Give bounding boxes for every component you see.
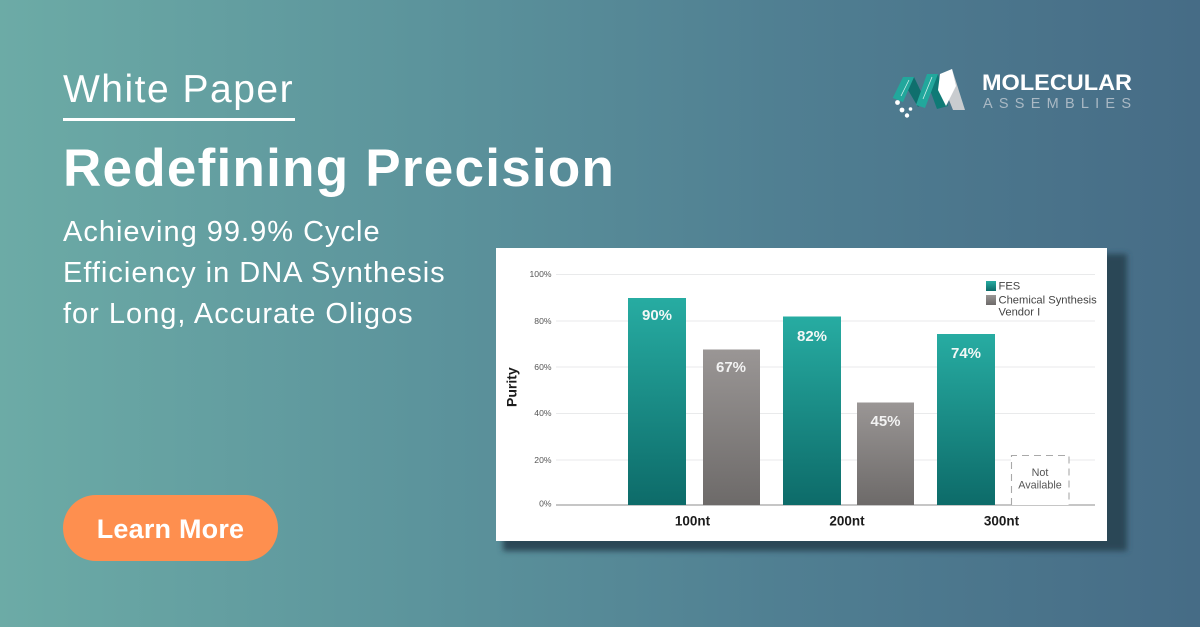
bar: 100nt FES 90% — [628, 298, 686, 505]
subtitle: for Long, Accurate Oligos — [63, 298, 414, 330]
bar: 200nt chemical 45%: 45% — [870, 413, 901, 430]
wordmark: ASSEMBLIES — [983, 96, 1131, 112]
button: Learn More: Learn More — [97, 514, 244, 544]
grid lines and y axis labels — [530, 269, 1095, 508]
grid lines and y axis labels: 40% — [534, 408, 552, 418]
bar: 300nt FES 74% — [937, 334, 995, 505]
x axis labels: 100nt — [675, 514, 711, 528]
icon: logo mark — [893, 69, 965, 118]
grid lines and y axis labels: 100% — [530, 269, 552, 279]
grid lines and y axis labels: 80% — [534, 316, 552, 326]
card shadow — [503, 254, 1127, 551]
legend: Vendor I — [998, 306, 1040, 318]
title: Redefining Precision — [63, 139, 615, 198]
grid lines and y axis labels: 60% — [534, 362, 552, 372]
subtitle: Achieving 99.9% Cycle — [63, 216, 381, 248]
eyebrow: White Paper: White Paper — [63, 68, 294, 111]
not available box: Available — [1018, 480, 1062, 492]
bar: 100nt chemical 67% — [703, 350, 760, 505]
button: Learn More — [63, 495, 278, 561]
legend: Chemical Synthesis — [998, 294, 1097, 306]
bar: 300nt FES 74%: 74% — [951, 345, 981, 362]
logo: Molecular Assemblies — [892, 69, 1132, 118]
legend: FES — [998, 280, 1020, 292]
bar: 200nt FES 82% — [783, 316, 841, 505]
x axis labels: 200nt — [829, 514, 865, 528]
not available box: Not — [1032, 467, 1048, 479]
x axis labels: 300nt — [984, 514, 1020, 528]
wordmark: MOLECULAR — [982, 70, 1132, 95]
panel: chart card — [496, 248, 1130, 554]
bar: 200nt FES 82%: 82% — [797, 328, 827, 345]
x axis labels — [675, 514, 1020, 528]
grid lines and y axis labels: 0% — [539, 498, 552, 508]
wordmark — [982, 70, 1132, 112]
bar: 100nt FES 90%: 90% — [642, 307, 672, 324]
not available box — [1011, 455, 1069, 505]
bar: 200nt chemical 45% — [857, 402, 914, 505]
subtitle — [63, 216, 446, 330]
bar: 100nt chemical 67%: 67% — [716, 359, 746, 376]
axis title: Purity: Purity — [504, 367, 520, 407]
subtitle: Efficiency in DNA Synthesis — [63, 257, 446, 289]
card background — [496, 248, 1107, 541]
grid lines and y axis labels: 20% — [534, 455, 552, 465]
legend — [986, 280, 1097, 318]
